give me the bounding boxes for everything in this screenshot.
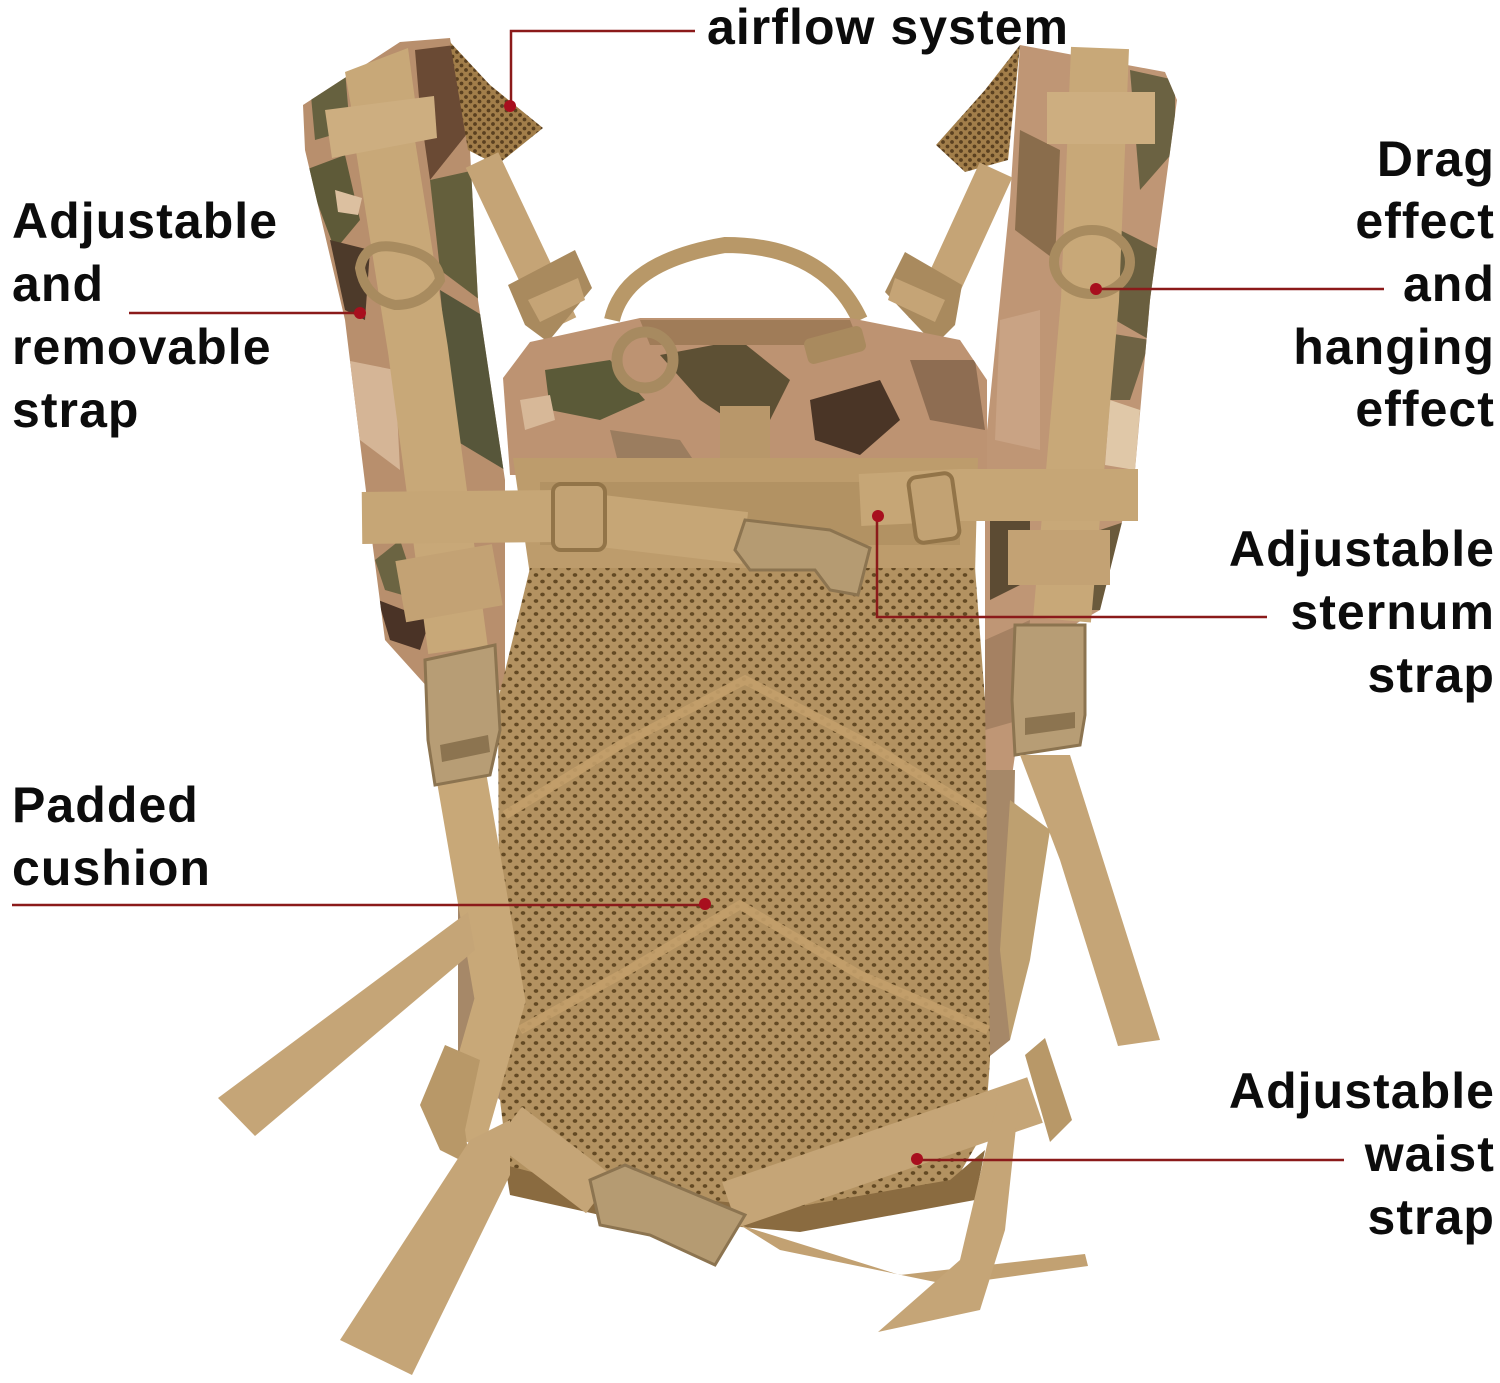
callout: adjustable waist strap: strap (1367, 1189, 1495, 1245)
callout: airflow system (504, 0, 1069, 112)
left side buckle (425, 645, 500, 785)
left d-ring (360, 246, 440, 305)
right d-ring (1054, 230, 1130, 294)
callout: adjustable waist strap: Adjustable (1229, 1063, 1495, 1119)
right side buckle (1012, 625, 1085, 755)
callout: padded cushion (12, 777, 711, 910)
callout: adjustable waist strap (911, 1063, 1495, 1245)
callout: drag effect and hanging effect (1090, 131, 1495, 437)
top camo compartment (500, 315, 990, 480)
lower left tail (340, 1120, 510, 1375)
callout: adjustable sternum strap (872, 510, 1495, 703)
left shoulder pad camo (300, 30, 510, 700)
callout: drag effect and hanging effect: and (1403, 256, 1495, 312)
callout: adjustable and removable strap: removable (12, 319, 272, 375)
callout: padded cushion: cushion (12, 840, 211, 896)
callout: adjustable sternum strap: Adjustable (1229, 521, 1495, 577)
callout: drag effect and hanging effect: effect (1355, 381, 1495, 437)
callout: drag effect and hanging effect: hanging (1293, 319, 1495, 375)
callout: padded cushion: Padded (12, 777, 199, 833)
lower right tails (740, 1225, 1088, 1285)
right shoulder pad camo (980, 40, 1180, 800)
lower mesh strip (505, 1150, 985, 1232)
callout: adjustable waist strap: waist (1364, 1126, 1495, 1182)
callout: drag effect and hanging effect: Drag (1377, 131, 1495, 187)
left hanging strap (218, 912, 475, 1136)
lower side camo sliver (985, 770, 1015, 1060)
callout: airflow system: airflow system (707, 0, 1069, 55)
callout: adjustable sternum strap: sternum (1290, 584, 1495, 640)
waist belt (508, 1100, 1035, 1205)
inner webbing buckles (508, 250, 592, 342)
callout: adjustable and removable strap: and (12, 256, 104, 312)
right main strap (1062, 48, 1100, 620)
waist loops (420, 1045, 480, 1165)
callout: adjustable and removable strap: Adjustable (12, 193, 278, 249)
back panel (513, 458, 978, 575)
left pad mesh flap (450, 42, 543, 165)
mesh back cushion (498, 568, 990, 1228)
waist buckle (590, 1165, 745, 1265)
callout: adjustable and removable strap (12, 193, 366, 438)
callout: drag effect and hanging effect: effect (1355, 193, 1495, 249)
callout: adjustable and removable strap: strap (12, 382, 140, 438)
cushion seams (505, 680, 988, 1030)
right pad mesh flap (936, 45, 1020, 172)
callout: adjustable sternum strap: strap (1367, 647, 1495, 703)
backpack illustration (218, 30, 1180, 1375)
inner shoulder webbing (482, 160, 996, 325)
left main strap (383, 130, 500, 1140)
right hanging strap (1020, 755, 1160, 1046)
sternum strap (362, 495, 1138, 538)
top compartment tab and d-ring (720, 406, 770, 468)
top handle (612, 245, 860, 320)
sternum buckle (735, 520, 870, 595)
